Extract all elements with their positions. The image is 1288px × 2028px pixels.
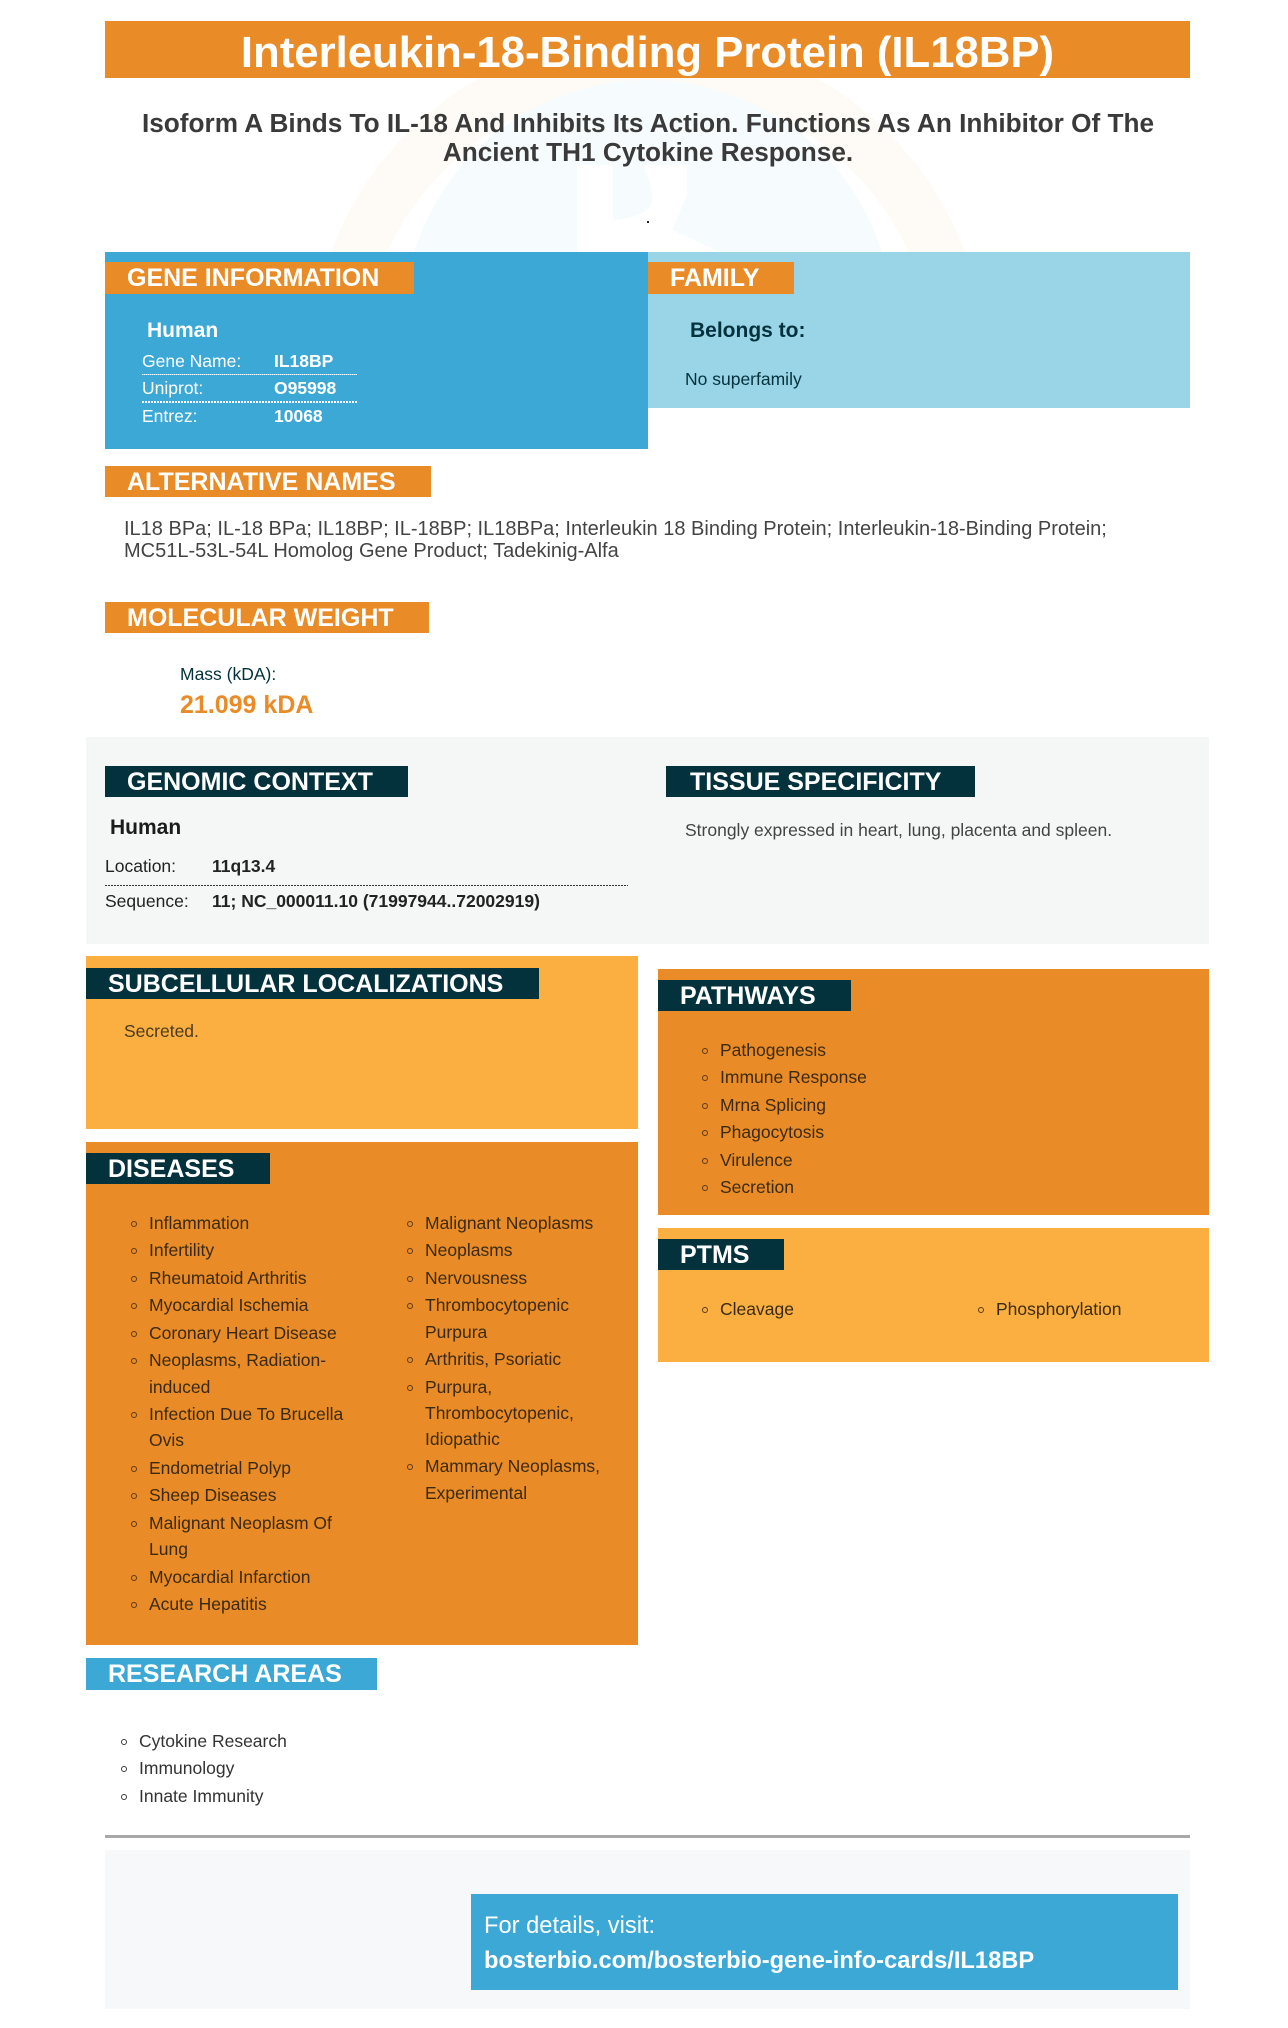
heading: family: FAMILY	[670, 264, 759, 292]
disease list column 1: Myocardial Ischemia	[149, 1295, 308, 1315]
disease list column 1: Inflammation	[149, 1213, 249, 1233]
panel: ptms	[658, 1228, 1209, 1362]
heading: ptms: PTMS	[680, 1241, 749, 1269]
disease list column 1	[131, 1213, 344, 1614]
belongs to label: Belongs to:	[690, 319, 806, 342]
subtitle: Ancient TH1 Cytokine Response.	[443, 137, 853, 167]
subtitle	[142, 108, 1154, 167]
location row: Location:	[105, 856, 176, 876]
sequence row: 11; NC_000011.10 (71997944..72002919)	[212, 891, 540, 911]
heading: research areas: RESEARCH AREAS	[108, 1660, 342, 1688]
disease list column 1: Infection Due To Brucella	[149, 1404, 343, 1424]
disease list column 2: Malignant Neoplasms	[425, 1213, 593, 1233]
alternative names text: MC51L-53L-54L Homolog Gene Product; Tadekinig-Alfa	[124, 540, 619, 562]
gene details table: O95998	[274, 378, 336, 398]
callout: details link	[471, 1894, 1178, 1990]
panel: diseases	[86, 1142, 638, 1645]
gene details table: IL18BP	[274, 351, 333, 371]
location row: 11q13.4	[212, 856, 275, 876]
heading: pathways: PATHWAYS	[680, 982, 816, 1010]
disease list column 1: Lung	[149, 1539, 188, 1559]
disease list column 2: Mammary Neoplasms,	[425, 1456, 600, 1476]
panel: footer	[105, 1850, 1190, 2009]
callout label: For details, visit:	[484, 1913, 655, 1939]
panel: gene information	[105, 252, 648, 449]
heading: genomic context: GENOMIC CONTEXT	[127, 768, 373, 796]
pathways list: Mrna Splicing	[720, 1095, 826, 1115]
ptm item: cleavage: Cleavage	[720, 1299, 794, 1319]
disease list column 2: Idiopathic	[425, 1429, 500, 1449]
disease list column 1: Rheumatoid Arthritis	[149, 1268, 307, 1288]
heading: ptms	[658, 1239, 784, 1270]
title banner	[105, 21, 1190, 78]
disease list column 1: Coronary Heart Disease	[149, 1323, 337, 1343]
pathways list: Secretion	[720, 1177, 794, 1197]
heading: family	[648, 262, 794, 294]
heading: molecular weight: MOLECULAR WEIGHT	[127, 604, 394, 632]
pathways list	[702, 1040, 867, 1197]
callout url: bosterbio.com/bosterbio-gene-info-cards/IL18BP	[484, 1948, 1034, 1974]
mass value: 21.099 kDA	[180, 691, 313, 719]
heading: gene information: GENE INFORMATION	[127, 264, 379, 292]
disease list column 2	[407, 1213, 600, 1503]
disease list column 1: Acute Hepatitis	[149, 1594, 267, 1614]
mass label: Mass (kDA):	[180, 664, 276, 684]
species label: Human	[110, 816, 181, 839]
disease list column 2: Nervousness	[425, 1268, 527, 1288]
pathways list: Pathogenesis	[720, 1040, 826, 1060]
panel: subcellular localizations	[86, 956, 638, 1129]
pathways list: Immune Response	[720, 1067, 867, 1087]
disease list column 2: Neoplasms	[425, 1240, 513, 1260]
disease list column 1: induced	[149, 1377, 210, 1397]
gene details table: Entrez:	[142, 406, 197, 426]
species label: Human	[147, 319, 218, 342]
heading: diseases: DISEASES	[108, 1155, 234, 1183]
pathways list: Virulence	[720, 1150, 793, 1170]
title banner: Interleukin-18-Binding Protein (IL18BP)	[241, 28, 1054, 77]
family value: No superfamily	[685, 369, 802, 389]
subcellular text: Secreted.	[124, 1021, 199, 1041]
disease list column 1: Myocardial Infarction	[149, 1567, 310, 1587]
heading: pathways	[658, 980, 851, 1011]
disease list column 1: Neoplasms, Radiation-	[149, 1350, 326, 1370]
pathways list: Phagocytosis	[720, 1122, 824, 1142]
disease list column 1: Ovis	[149, 1430, 184, 1450]
research areas list: Immunology	[139, 1758, 234, 1778]
disease list column 2: Purpura,	[425, 1377, 492, 1397]
disease list column 2: Experimental	[425, 1483, 527, 1503]
research areas list: Innate Immunity	[139, 1786, 264, 1806]
gene details table: Uniprot:	[142, 378, 203, 398]
disease list column 1: Malignant Neoplasm Of	[149, 1513, 332, 1533]
disease list column 2: Purpura	[425, 1322, 487, 1342]
alternative names text: IL18 BPa; IL-18 BPa; IL18BP; IL-18BP; IL18BPa; Interleukin 18 Binding Protein; Interleukin-18-Binding Protein;	[124, 518, 1107, 540]
sequence row: Sequence:	[105, 891, 189, 911]
disease list column 2: Thrombocytopenic	[425, 1295, 569, 1315]
research areas list	[121, 1731, 287, 1806]
location row	[105, 856, 628, 886]
panel: genomic context and tissue specificity	[86, 737, 1209, 944]
heading: tissue specificity: TISSUE SPECIFICITY	[690, 768, 941, 796]
gene details table: Gene Name:	[142, 351, 241, 371]
disease list column 1: Sheep Diseases	[149, 1485, 276, 1505]
panel: family	[648, 252, 1190, 408]
gene details table	[142, 351, 357, 426]
panel: pathways	[658, 969, 1209, 1215]
tissue specificity text: Strongly expressed in heart, lung, placenta and spleen.	[685, 820, 1112, 840]
disease list column 1: Endometrial Polyp	[149, 1458, 291, 1478]
disease list column 1: Infertility	[149, 1240, 214, 1260]
subtitle: Isoform A Binds To IL-18 And Inhibits Its Action. Functions As An Inhibitor Of The	[142, 108, 1154, 138]
heading: subcellular localizations: SUBCELLULAR LOCALIZATIONS	[108, 970, 503, 998]
disease list column 2: Thrombocytopenic,	[425, 1403, 574, 1423]
footer divider	[105, 1835, 1190, 1838]
ptm item: phosphorylation: Phosphorylation	[996, 1299, 1122, 1319]
disease list column 2: Arthritis, Psoriatic	[425, 1349, 561, 1369]
background watermark logo	[331, 78, 964, 252]
research areas list: Cytokine Research	[139, 1731, 287, 1751]
alternative names text	[124, 518, 1107, 562]
heading: alternative names: ALTERNATIVE NAMES	[127, 468, 396, 496]
dot mark	[647, 221, 649, 223]
gene details table: 10068	[274, 406, 323, 426]
heading: diseases	[86, 1153, 270, 1184]
